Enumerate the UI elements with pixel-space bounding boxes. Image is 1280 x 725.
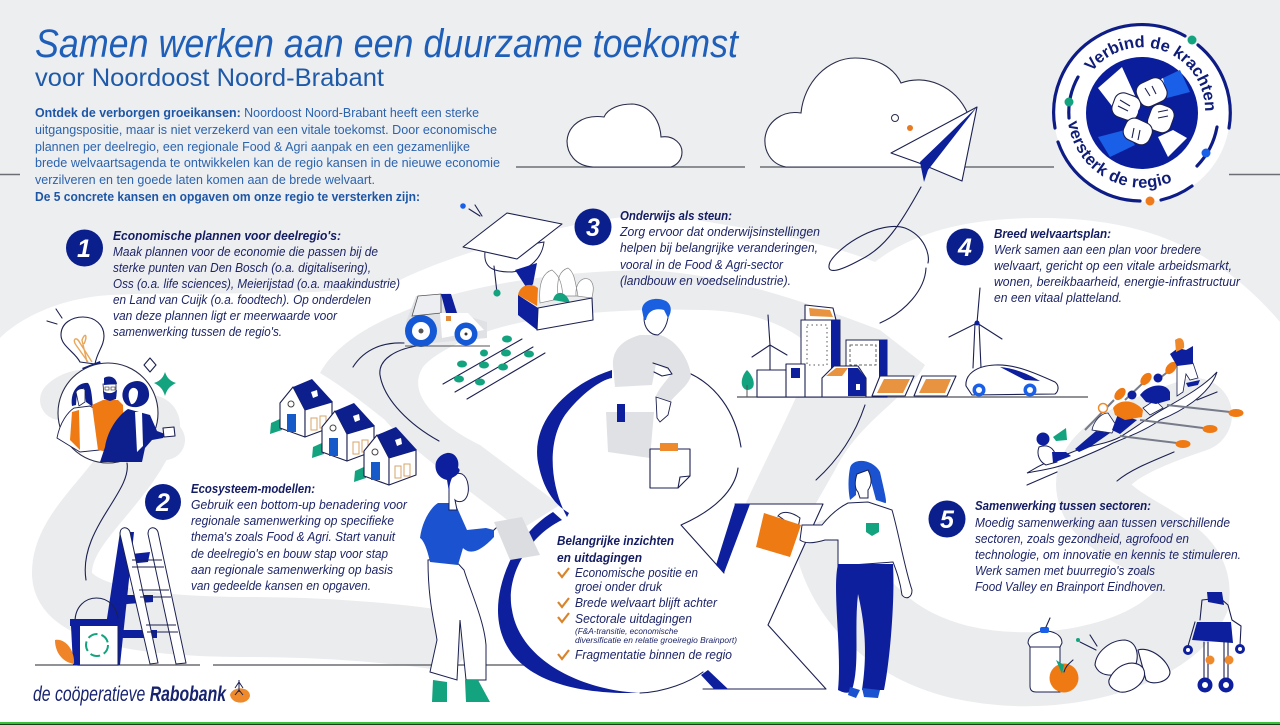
text block 4: en een vitaal platteland. (994, 290, 1122, 305)
house 1 (270, 379, 333, 437)
icon: green star (154, 372, 176, 396)
horizon lines (0, 167, 1280, 665)
background: grey swooshes (60, 270, 1195, 669)
text block 5: Moedig samenwerking aan tussen verschillende (975, 515, 1230, 530)
house 2 (312, 403, 375, 461)
intro text block: uitgangspositie, maar is niet verzekerd van een vitale toekomst. Door economische (35, 122, 497, 137)
text block 2: Gebruik een bottom-up benadering voor (191, 497, 408, 512)
callout: insights text: Belangrijke inzichten (557, 533, 674, 548)
illustration: vegetable crate (518, 268, 593, 330)
illustration: road lines (353, 343, 439, 441)
number badge 3: 3 (586, 214, 600, 242)
text block 1: van deze plannen ligt er meerwaarde voor (113, 308, 338, 323)
badge: verbind de krachten (1052, 23, 1232, 206)
callout: insights text: Economische positie en (575, 565, 698, 580)
woman left (57, 383, 100, 452)
text block 4: welvaart, gericht op een vitale arbeidsmarkt, (994, 258, 1232, 273)
illustration: man pointing (613, 299, 691, 422)
number badge 3 (574, 208, 612, 246)
text block 4: Werk samen aan een plan voor bredere (994, 242, 1201, 257)
panel: kans 1 (66, 228, 400, 339)
wind turbine right (949, 288, 1002, 368)
text block 3: vooral in de Food & Agri-sector (620, 257, 784, 272)
text block 5: technologie, om innovatie en kennis te stimuleren. (975, 547, 1241, 562)
callout: insights text: Fragmentatie binnen de regio (575, 647, 732, 662)
callout: insights text: en uitdagingen (557, 550, 642, 565)
text block 4: wonen, bereikbaarheid, energie-infrastructuur (994, 274, 1241, 289)
callout: insights text: Brede welvaart blijft achter (575, 595, 718, 610)
icon: orange leaf (55, 640, 74, 664)
text block 2: de deelregio's en bouw stap voor stap (191, 546, 388, 561)
wind turbine left (752, 315, 787, 397)
illustration: grey paper with clip (606, 404, 654, 458)
text block 1: Oss (o.a. life sciences), Meierijstad (o.a. maakindustrie) (113, 276, 400, 291)
number badge 2: 2 (155, 489, 170, 517)
illustration: grey paper (494, 517, 540, 560)
icon: large cloud (765, 58, 968, 167)
heading 3: Onderwijs als steun: (620, 208, 732, 223)
rower 1 (1092, 413, 1116, 433)
number badge 5: 5 (940, 506, 955, 534)
man center (92, 376, 124, 452)
decorative wave line (1117, 452, 1174, 481)
intro text block: verzilveren en ten goede laten komen aan de brede welvaart. (35, 172, 375, 187)
illustration: crop rows (443, 336, 545, 399)
callout: insights text: Sectorale uitdagingen (575, 611, 692, 626)
number badge 2 (145, 484, 181, 520)
illustration: woman with blue hair (756, 461, 912, 698)
background: white landscape (0, 214, 1280, 722)
illustration: ladder (100, 528, 186, 665)
text block 2: thema's zoals Food & Agri. Start vanuit (191, 529, 396, 544)
illustration: potatoes (1076, 635, 1170, 692)
panel: kans 5 (928, 498, 1241, 594)
subtitle: voor Noordoost Noord-Brabant (35, 64, 384, 92)
illustration: woman with bun (420, 453, 510, 702)
connector line (85, 463, 127, 580)
illustration: houses (270, 379, 417, 485)
text block 2: regionale samenwerking op specifieke (191, 513, 394, 528)
icon: paper plane (891, 107, 977, 182)
rower 3 (1143, 400, 1163, 415)
logo: Rabobank: de coöperatieve Rabobank (33, 683, 227, 706)
illustration: recycle bucket (70, 598, 121, 665)
text block 3: (landbouw en voedselindustrie). (620, 273, 791, 288)
title: Samen werken aan een duurzame toekomst (35, 22, 740, 66)
panel: kans 2 (145, 481, 408, 593)
boat (1027, 372, 1217, 473)
heading 2: Ecosysteem-modellen: (191, 481, 315, 496)
standing figure (1177, 363, 1198, 396)
arrow: flight path (829, 187, 928, 323)
text block 1 (113, 244, 400, 339)
number badge 1: 1 (77, 235, 91, 263)
text block 5: Werk samen met buurregio's zoals (975, 563, 1155, 578)
number badge 5 (928, 500, 966, 538)
illustration: big ampersand shape (498, 370, 826, 693)
number badge 1 (66, 230, 103, 266)
illustration: sticky note (650, 443, 690, 488)
woman right (100, 381, 175, 462)
illustration: robot (1183, 592, 1245, 692)
intro text block: plannen per deelregio, een regionale Food & Agri aanpak en een gezamenlijke (35, 139, 470, 154)
illustration: city with buildings and wind turbines (742, 288, 1058, 397)
intro text block (35, 105, 500, 204)
illustration: rowing team (1027, 338, 1244, 485)
badge text bottom: versterk de regio (1068, 120, 1171, 191)
icon: small cloud (567, 104, 682, 167)
house 3 (354, 427, 417, 485)
intro text block: De 5 concrete kansen en opgaven om onze regio te versterken zijn: (35, 189, 420, 204)
cox with megaphone (1038, 446, 1057, 465)
illustration: jar (1028, 618, 1062, 692)
illustration: apple (1050, 660, 1078, 692)
number badge 4 (946, 228, 984, 266)
callout: insights text: (F&A-transitie, economische (575, 627, 679, 636)
bottom green bar (0, 722, 1280, 725)
intro text block: Ontdek de verborgen groeikansen: Noordoost Noord-Brabant heeft een sterke (35, 105, 479, 120)
callout: insights text (557, 533, 737, 662)
text block 3 (619, 224, 820, 288)
text block 5: Food Valley en Brainport Eindhoven. (975, 579, 1166, 594)
text block 5: sectoren, zoals gezondheid, agrofood en (975, 531, 1189, 546)
car (966, 365, 1058, 395)
text block 4 (994, 242, 1241, 305)
text block 1: Maak plannen voor de economie die passen bij de (113, 244, 378, 259)
heading 5: Samenwerking tussen sectoren: (975, 498, 1151, 513)
illustration: graduation cap (460, 203, 562, 297)
text block 3: Zorg ervoor dat onderwijsinstellingen (619, 224, 820, 239)
badge text top: Verbind de krachten (1084, 35, 1214, 110)
heading 4: Breed welvaartsplan: (994, 226, 1111, 241)
text block 3: helpen bij belangrijke veranderingen, (620, 240, 818, 255)
text block 2 (191, 497, 408, 593)
icon: sparkle (144, 358, 156, 372)
text block 2: aan regionale samenwerking op basis (191, 562, 393, 577)
intro text block: brede welvaartsagenda te ontwikkelen kan de regio kansen in de nieuwe economie (35, 155, 500, 170)
text block 5 (975, 515, 1241, 594)
solar panels (872, 376, 914, 396)
rower 2 (1112, 414, 1137, 434)
number badge 4: 4 (957, 234, 972, 262)
callout: insights text: diversificatie en relatie groeiregio Brainport) (575, 636, 737, 645)
text block 2: van gedeelde kansen en opgaven. (191, 578, 371, 593)
panel: kans 3 (574, 208, 820, 288)
oars (1085, 370, 1230, 443)
decorative flight line (816, 405, 865, 480)
illustration: lightbulb (47, 309, 104, 376)
illustration: team of three people in circle (57, 363, 175, 463)
icon: check marks (558, 568, 569, 659)
text block 1: sterke punten van Den Bosch (o.a. digitalisering), (113, 260, 371, 275)
callout: insights text: groei onder druk (575, 579, 663, 594)
text block 1: samenwerking tussen de regio's. (113, 324, 282, 339)
text block 1: en Land van Cuijk (o.a. foodtech). Op onderdelen (113, 292, 371, 307)
panel: kans 4 (946, 226, 1241, 305)
heading 1: Economische plannen voor deelregio's: (113, 228, 341, 243)
illustration: tractor (405, 293, 490, 347)
